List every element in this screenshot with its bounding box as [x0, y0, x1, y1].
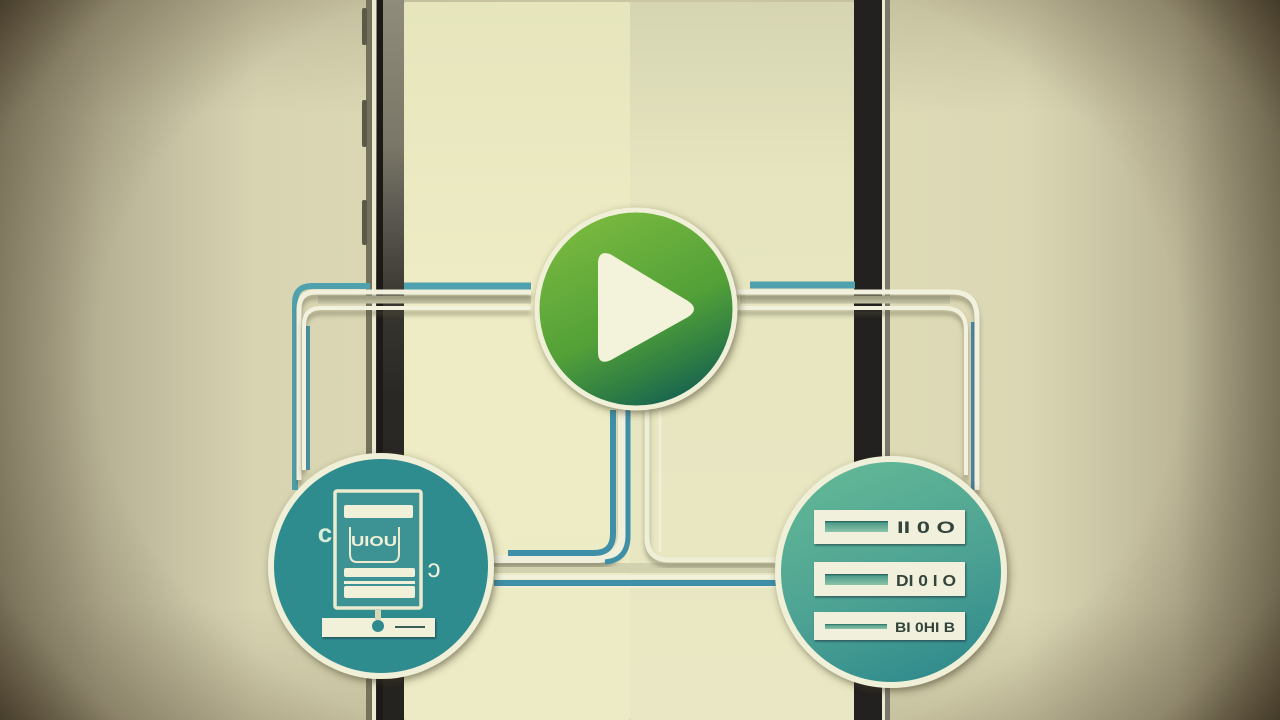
connector: centre left branch: [490, 405, 628, 562]
app label box: [350, 527, 399, 562]
list row 2: DI 0 I O: [896, 573, 956, 590]
phone side buttons: [362, 8, 367, 245]
connector: bottom horizontal: [490, 577, 776, 587]
icon: list circle: [778, 459, 1004, 685]
connector: centre right branch: [647, 405, 776, 560]
app side glyphs: ɔ: [428, 553, 440, 583]
phone body: [362, 0, 890, 720]
icon: play button: [537, 210, 735, 408]
play triangle: [598, 253, 694, 362]
phone left edge: [366, 0, 404, 720]
app circle base: [271, 456, 491, 676]
app label box: UIOU: [351, 533, 397, 550]
app screen frame: [335, 491, 421, 608]
phone screen: [404, 2, 854, 720]
icon: mobile app circle: [271, 456, 491, 676]
list row 3: BI 0HI B: [895, 619, 955, 635]
connector: left bracket: [295, 286, 531, 490]
app base stand: [322, 610, 435, 637]
list row 2: [814, 562, 965, 596]
list circle base: [778, 459, 1004, 685]
app text rows: [344, 568, 415, 598]
connector: lower shadow band: [490, 563, 776, 573]
connector lines: [295, 285, 977, 587]
list row 1: [814, 510, 965, 544]
app side glyphs: c: [318, 518, 332, 548]
list row 3: [814, 612, 965, 640]
phone right edge: [854, 0, 890, 720]
list row 1: II 0 O: [897, 518, 955, 537]
connector: right bracket: [735, 285, 977, 490]
app header bar: [344, 505, 413, 518]
app side glyphs: [318, 518, 440, 583]
